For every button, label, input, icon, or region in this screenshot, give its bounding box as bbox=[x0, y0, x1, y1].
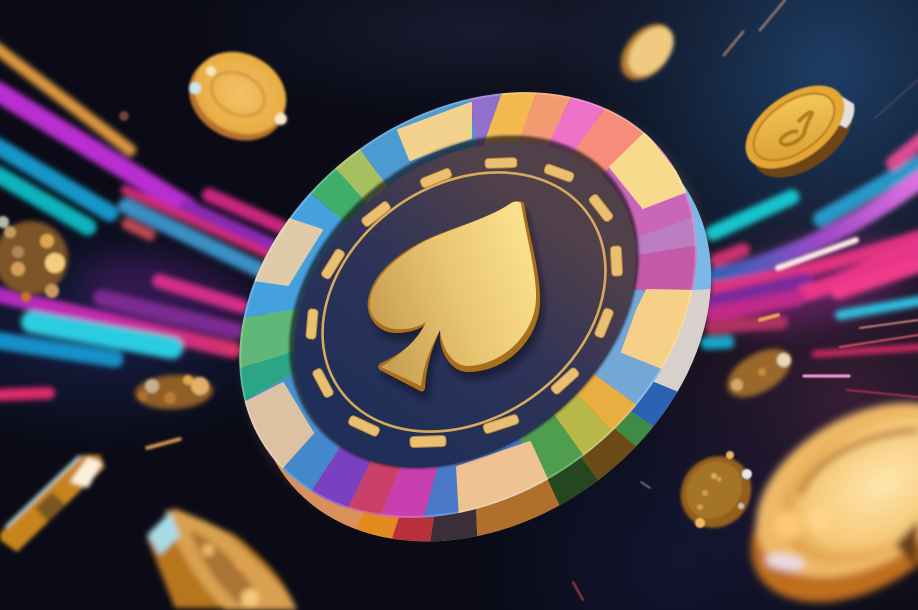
coin: bottom left edge-on bbox=[0, 455, 105, 552]
coin: top center bbox=[610, 14, 684, 90]
sharp right sparks bbox=[573, 0, 918, 600]
spade shadow bbox=[372, 209, 544, 400]
chip gold dashes bbox=[306, 157, 623, 448]
chip face rim highlight bbox=[157, 5, 779, 605]
coin: large lower right bbox=[721, 367, 918, 610]
chip rim colour stripes bbox=[223, 84, 712, 527]
coin: lower right small bbox=[666, 442, 766, 542]
poker chip bbox=[239, 92, 711, 542]
coin: right flat blurred bbox=[719, 339, 799, 407]
chip inner shadow bbox=[223, 67, 705, 537]
coin: left blurred with bokeh bbox=[0, 216, 68, 302]
right streak glow wash bbox=[704, 222, 916, 348]
spade gold edge bbox=[368, 201, 540, 392]
chip gold ring bbox=[272, 119, 656, 485]
left streak glow wash bbox=[73, 239, 267, 361]
chip centre disc bbox=[230, 76, 700, 534]
spade top face bbox=[370, 202, 536, 386]
coin: bottom large bbox=[147, 508, 297, 610]
coin: left flat blurred bbox=[134, 373, 214, 411]
chip glow bbox=[156, 6, 794, 610]
chip side edge bbox=[256, 117, 711, 542]
coin: upper right bbox=[731, 69, 867, 194]
small left sparks bbox=[119, 111, 180, 448]
left light streaks bbox=[0, 47, 281, 395]
coin: top left bbox=[174, 36, 301, 157]
chip beige blocks bbox=[240, 103, 700, 520]
right light streaks bbox=[707, 137, 918, 354]
